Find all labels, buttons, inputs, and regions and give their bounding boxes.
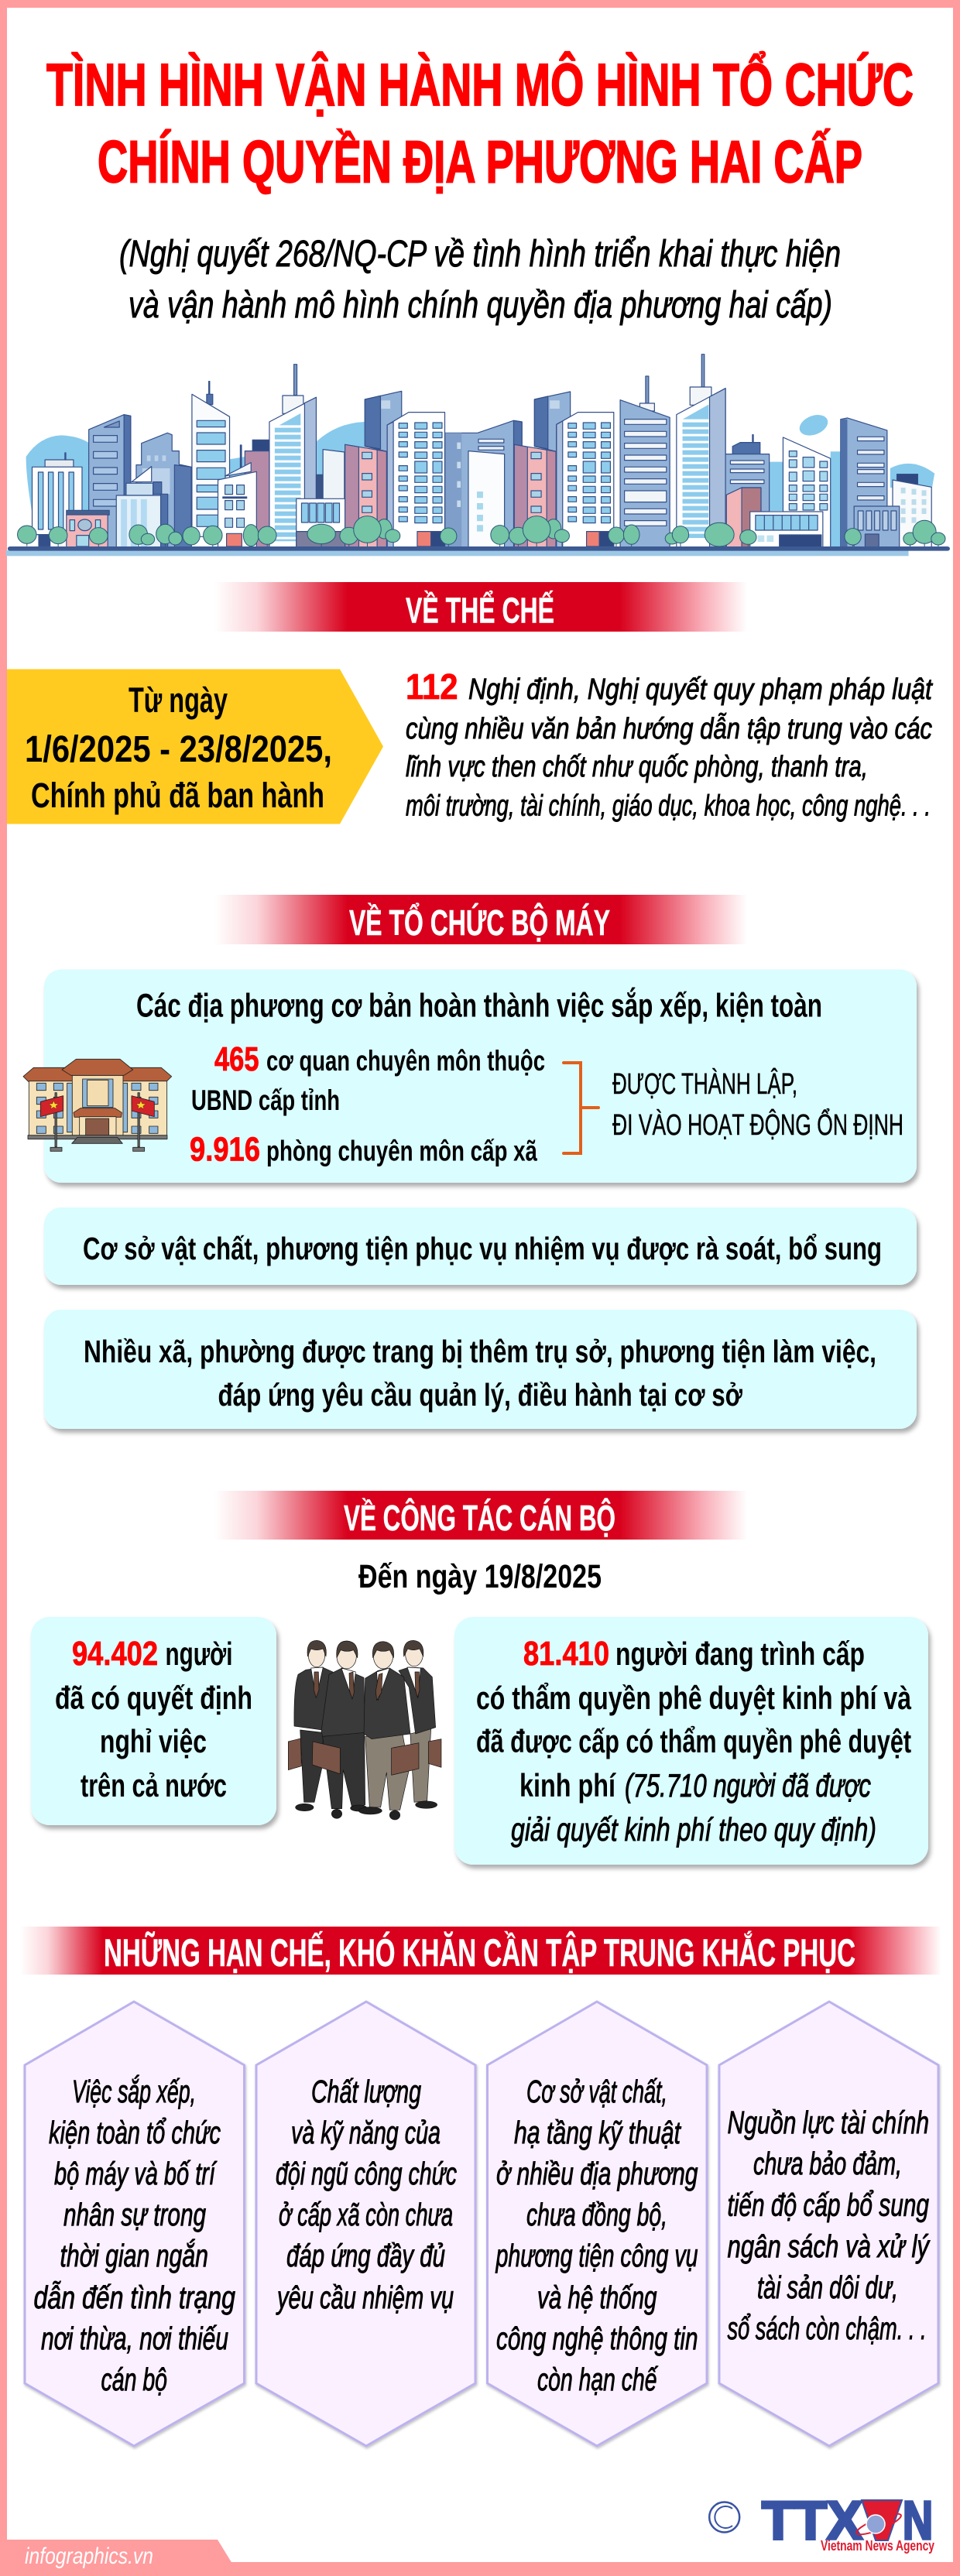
section heading: về công tác cán bộ: VỀ CÔNG TÁC CÁN BỘ <box>344 1498 615 1538</box>
trees <box>18 516 945 546</box>
stat: 465 agencies: cơ quan chuyên môn thuộc <box>266 1045 545 1077</box>
panel: limitation 2: đội ngũ công chức <box>276 2156 457 2191</box>
panel: limitation 3 <box>488 2002 707 2446</box>
panel: limitation 1: kiện toàn tổ chức <box>49 2115 221 2150</box>
section heading: về thể chế <box>214 582 747 632</box>
panel: limitation 3: phương tiện công vụ <box>495 2238 698 2273</box>
panel: limitation 2: yêu cầu nhiệm vụ <box>276 2280 454 2315</box>
panel: limitation 3: và hệ thống <box>537 2280 657 2315</box>
panel: 81.410 people <box>454 1617 928 1865</box>
icon: government building with flags <box>23 1059 172 1151</box>
panel: limitation 1: nhân sự trong <box>63 2197 206 2232</box>
text block: 112 decrees: 112 <box>406 666 458 707</box>
panel: limitation 1: nơi thừa, nơi thiếu <box>41 2321 228 2356</box>
logo: TTXVN <box>762 2490 934 2554</box>
panel: limitation 3: chưa đồng bộ, <box>526 2197 667 2232</box>
panel: communes equipped <box>44 1310 917 1429</box>
panel: limitation 1 <box>25 2002 245 2446</box>
panel: 81.410 people: người đang trình cấp <box>615 1636 865 1672</box>
panel: limitation 2: ở cấp xã còn chưa <box>279 2197 453 2232</box>
stat: 9.916 offices <box>190 1130 537 1169</box>
panel: limitation 4 <box>719 2002 938 2446</box>
stat: 9.916 offices: 9.916 <box>190 1130 260 1169</box>
panel: 81.410 people: 81.410 <box>523 1635 609 1673</box>
panel: 94.402 people: trên cả nước <box>81 1767 227 1804</box>
panel: limitation 2: đáp ứng đầy đủ <box>286 2238 445 2273</box>
panel: 94.402 people: đã có quyết định <box>55 1680 252 1716</box>
status text: ĐƯỢC THÀNH LẬP, <box>612 1067 797 1101</box>
panel: 81.410 people: kinh phí <box>519 1767 616 1804</box>
panel: limitation 3: hạ tầng kỹ thuật <box>514 2115 681 2150</box>
panel: limitation 1: Việc sắp xếp, <box>72 2074 196 2109</box>
section heading: về công tác cán bộ <box>214 1491 747 1540</box>
panel: limitation 2 <box>256 2002 475 2446</box>
logo: TTXVN: N <box>903 2490 933 2550</box>
panel: limitation 3: còn hạn chế <box>537 2362 659 2397</box>
panel: limitation 2: và kỹ năng của <box>291 2115 441 2150</box>
panel: limitation 2: Chất lượng <box>311 2074 421 2109</box>
back block and pink tower left <box>345 391 445 547</box>
stat: 9.916 offices: phòng chuyên môn cấp xã <box>266 1135 537 1167</box>
stat: 465 agencies <box>191 1040 545 1116</box>
date callout arrow: 1/6/2025 - 23/8/2025, <box>25 729 332 770</box>
panel: limitation 4: chưa bảo đảm, <box>753 2146 902 2181</box>
footer tab: infographics.vn: infographics.vn <box>25 2543 153 2569</box>
panel: 94.402 people <box>31 1617 276 1825</box>
date callout arrow: Từ ngày <box>129 680 228 720</box>
illustration: four officials with briefcases <box>288 1640 441 1820</box>
panel: organisation card <box>44 969 917 1183</box>
panel: limitation 3: Cơ sở vật chất, <box>526 2074 667 2109</box>
title <box>46 51 914 195</box>
ground <box>6 550 909 556</box>
panel: limitation 4: tài sản dôi dư, <box>757 2269 898 2305</box>
subtitle <box>119 234 841 326</box>
stat: 465 agencies: UBND cấp tỉnh <box>191 1084 340 1116</box>
left building group <box>33 415 191 547</box>
panel: limitation 1: cán bộ <box>101 2362 167 2397</box>
sky blobs <box>26 411 934 547</box>
panel: 94.402 people: 94.402 <box>72 1635 158 1673</box>
date callout arrow <box>7 669 383 824</box>
panel: limitation 1: thời gian ngắn <box>60 2238 208 2273</box>
panel: limitation 3: công nghệ thông tin <box>496 2321 698 2356</box>
panel: communes equipped: đáp ứng yêu cầu quản lý, điều hành tại cơ sở <box>218 1377 743 1413</box>
status text <box>612 1067 903 1142</box>
panel: limitation 1: dẫn đến tình trạng <box>34 2280 235 2315</box>
panel: facilities reviewed <box>44 1208 917 1285</box>
date label: Đến ngày 19/8/2025 <box>358 1558 602 1595</box>
center and right buildings <box>445 355 931 547</box>
text block: 112 decrees <box>406 666 933 822</box>
section heading: về tổ chức bộ máy <box>214 895 747 944</box>
panel: 94.402 people: nghỉ việc <box>100 1723 207 1759</box>
panel: 81.410 people: (75.710 người đã được <box>625 1767 871 1804</box>
panel: 94.402 people: người <box>166 1636 232 1672</box>
copyright symbol <box>709 2502 739 2533</box>
illustration: city skyline <box>6 355 950 556</box>
central left towers <box>192 365 345 547</box>
logo: TTXVN: TTX <box>762 2490 862 2550</box>
panel: limitation 3: ở nhiều địa phương <box>496 2156 698 2191</box>
date callout arrow: Chính phủ đã ban hành <box>31 776 324 815</box>
panel: limitation 1: bộ máy và bố trí <box>54 2156 218 2191</box>
footer tab: infographics.vn <box>7 2540 232 2569</box>
stat: 465 agencies: 465 <box>214 1040 259 1078</box>
bracket <box>564 1063 598 1153</box>
section heading: về tổ chức bộ máy: VỀ TỔ CHỨC BỘ MÁY <box>349 903 610 943</box>
section heading: về thể chế: VỀ THỂ CHẾ <box>406 590 554 630</box>
